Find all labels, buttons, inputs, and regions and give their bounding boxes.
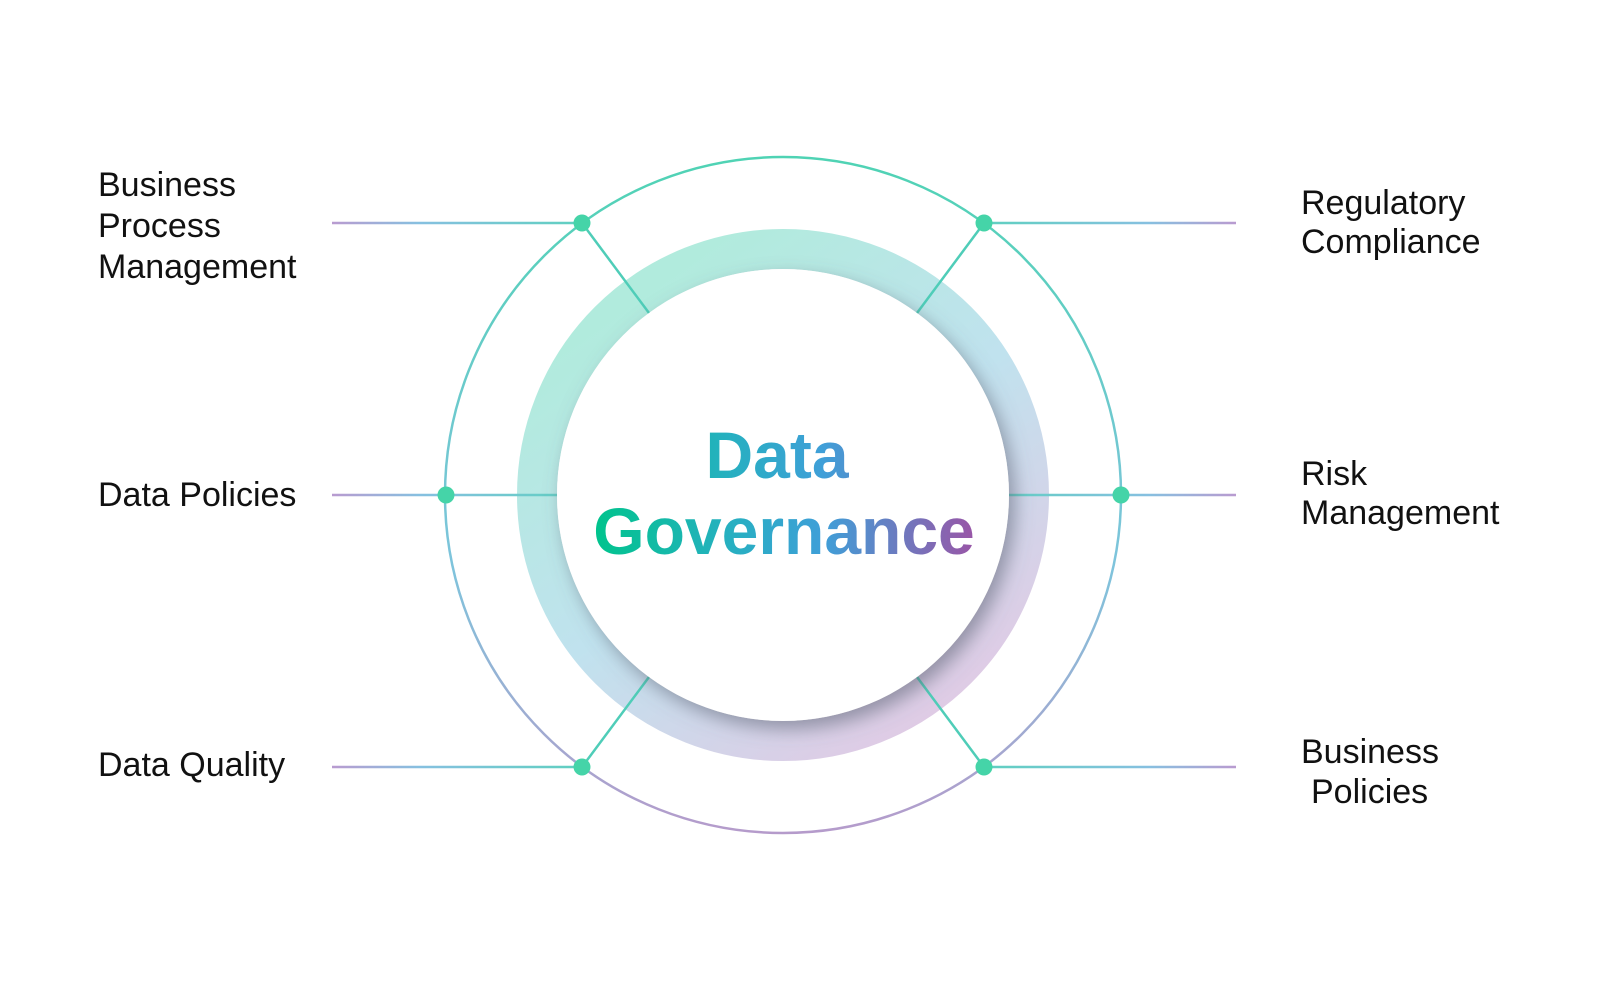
label: Business Process Management: Business <box>98 166 236 204</box>
title: Data Governance: Governance <box>593 494 975 568</box>
label: Data Policies: Data Policies <box>98 476 296 514</box>
connector lines <box>332 223 1236 767</box>
label: Business Process Management: Process <box>98 207 221 245</box>
title: Data Governance: Data <box>705 418 850 492</box>
gradient ring <box>537 249 1029 741</box>
label: Business Process Management: Management <box>98 248 297 286</box>
label: Risk Management: Management <box>1301 494 1500 532</box>
label: Regulatory Compliance: Regulatory <box>1301 184 1465 222</box>
inner white circle <box>557 269 1009 721</box>
label: Business Policies: Policies <box>1311 773 1428 811</box>
label: Data Quality: Data Quality <box>98 746 285 784</box>
label: Business Policies: Business <box>1301 733 1439 771</box>
title: Data Governance <box>593 418 975 568</box>
label: Regulatory Compliance: Compliance <box>1301 223 1481 261</box>
label: Risk Management: Risk <box>1301 455 1368 493</box>
dots <box>438 214 1130 776</box>
outer circle <box>445 157 1121 833</box>
